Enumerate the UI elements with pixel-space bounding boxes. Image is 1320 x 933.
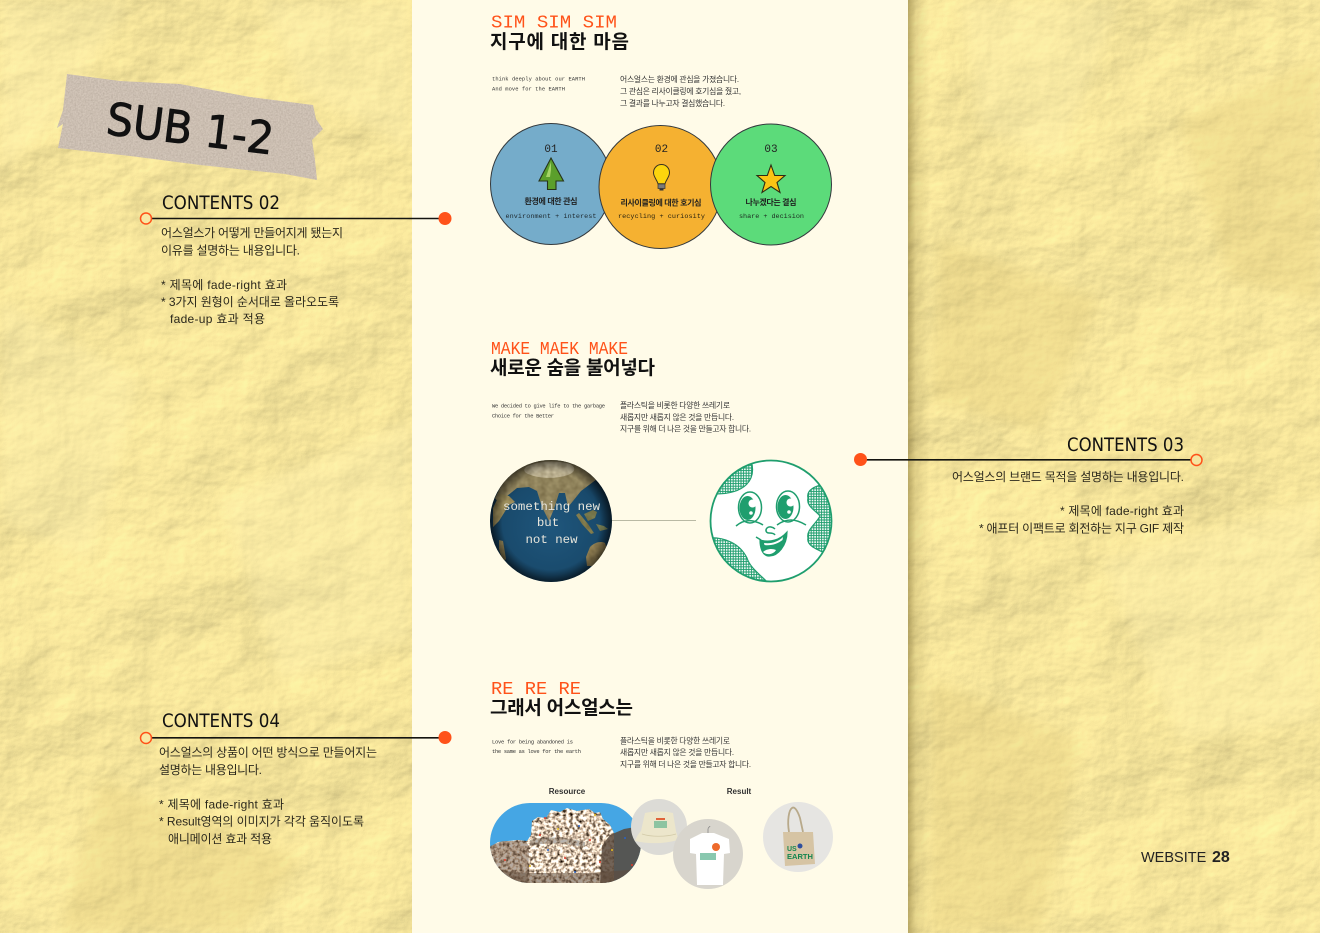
callout description bbox=[952, 470, 1184, 536]
callout description: 어스얼스의 브랜드 목적을 설명하는 내용입니다. bbox=[952, 470, 1184, 484]
section 1 intro text: 그 관심은 리사이클링에 호기심을 줬고, bbox=[620, 86, 741, 96]
dotted land patches bbox=[714, 464, 831, 580]
resource photo: plastic waste heap bbox=[490, 803, 641, 883]
circle 02: recycling + curiosity bbox=[618, 213, 705, 221]
globe caption: something new bbox=[503, 500, 601, 514]
callout description: * Result영역의 이미지가 각각 움직이도록 bbox=[159, 814, 364, 828]
icon: green arrow tree bbox=[539, 158, 564, 190]
circle 01: environment + interest bbox=[506, 213, 596, 221]
section 3 intro text: 새롭지만 새롭지 않은 것을 만듭니다. bbox=[620, 747, 734, 757]
connector line with end dots bbox=[140, 212, 452, 225]
globe caption bbox=[503, 500, 601, 547]
section 3 intro text: Love for being abandoned is bbox=[492, 740, 573, 746]
result photo: tote bag: EARTH bbox=[787, 852, 813, 861]
callout: contents 02 bbox=[140, 193, 452, 326]
section 2 heading: MAKE MAEK MAKE bbox=[490, 340, 656, 379]
callout: contents 04 bbox=[140, 711, 452, 846]
icon: light bulb bbox=[654, 164, 670, 190]
face bbox=[736, 491, 806, 556]
circle 03 bbox=[710, 124, 832, 245]
callout description: * 3가지 원형이 순서대로 올라오도록 bbox=[161, 295, 339, 309]
callout description: * 애프터 이팩트로 회전하는 지구 GIF 제작 bbox=[979, 522, 1184, 536]
section 3 heading: RE RE RE bbox=[490, 680, 633, 719]
callout description bbox=[159, 746, 377, 846]
column labels: Resource bbox=[549, 787, 586, 796]
circle 03: 03 bbox=[764, 144, 778, 156]
circle 01 bbox=[490, 124, 612, 244]
title text: SUB 1-2 bbox=[104, 92, 277, 165]
circle 03: share + decision bbox=[739, 213, 804, 221]
callout description: 어스얼스의 상품이 어떤 방식으로 만들어지는 bbox=[159, 746, 377, 760]
page number bbox=[1141, 849, 1230, 866]
section 1 intro text: 그 결과를 나누고자 결심했습니다. bbox=[620, 98, 725, 108]
three overlapping circles bbox=[490, 124, 832, 248]
section 1 heading: SIM SIM SIM: SIM SIM SIM bbox=[491, 14, 617, 34]
result photo: tote bag: US bbox=[787, 846, 797, 853]
section 2 heading: MAKE MAEK MAKE: 새로운 숨을 불어넣다 bbox=[490, 357, 656, 379]
page number: WEBSITE bbox=[1141, 850, 1207, 866]
callout heading: CONTENTS 02 bbox=[162, 193, 280, 214]
masking tape title bbox=[57, 74, 323, 180]
callout description: * 제목에 fade-right 효과 bbox=[161, 278, 287, 292]
section 3 heading: RE RE RE: RE RE RE bbox=[491, 680, 581, 700]
section 3 heading: RE RE RE: 그래서 어스얼스는 bbox=[490, 697, 633, 719]
globe caption: but bbox=[537, 516, 559, 530]
callout description: 설명하는 내용입니다. bbox=[159, 763, 262, 777]
section 2 heading: MAKE MAEK MAKE: MAKE MAEK MAKE bbox=[491, 340, 628, 360]
circle 03: 나누겠다는 결심 bbox=[746, 197, 796, 207]
connector between globes bbox=[612, 520, 696, 522]
center page panel bbox=[412, 0, 930, 933]
callout description: 어스얼스가 어떻게 만들어지게 됐는지 bbox=[161, 226, 343, 240]
callout description: * 제목에 fade-right 효과 bbox=[159, 798, 284, 812]
callout description: * 제목에 fade-right 효과 bbox=[1060, 504, 1184, 518]
callout: contents 03 bbox=[854, 435, 1202, 536]
callout description: 이유를 설명하는 내용입니다. bbox=[161, 244, 300, 258]
section 2 intro text: 새롭지만 새롭지 않은 것을 만듭니다. bbox=[620, 412, 734, 422]
column labels: Result bbox=[727, 787, 752, 796]
callout description: fade-up 효과 적용 bbox=[170, 312, 265, 326]
result photo: t-shirt bbox=[673, 819, 743, 889]
section 1 intro text bbox=[492, 74, 741, 108]
land masses bbox=[493, 458, 608, 566]
tape strip bbox=[57, 74, 323, 180]
callout description: 애니메이션 효과 적용 bbox=[168, 832, 272, 846]
result photo: bucket hat bbox=[631, 799, 687, 855]
section 1 heading: SIM SIM SIM: 지구에 대한 마음 bbox=[490, 31, 629, 53]
callout heading: CONTENTS 03 bbox=[1067, 435, 1184, 456]
circle 01: 01 bbox=[544, 144, 558, 156]
section 2 intro text: 플라스틱을 비롯한 다양한 쓰레기로 bbox=[620, 400, 730, 410]
result photo: tote bag bbox=[763, 802, 833, 872]
section 3 intro text bbox=[492, 736, 751, 769]
connector line with end dots bbox=[140, 731, 452, 744]
section 3 intro text: 플라스틱을 비롯한 다양한 쓰레기로 bbox=[620, 736, 730, 746]
section 1 intro text: 어스얼스는 환경에 관심을 가졌습니다. bbox=[620, 74, 739, 84]
page number: 28 bbox=[1212, 849, 1230, 866]
globe caption: not new bbox=[525, 533, 578, 547]
section 2 intro text: Choice for the Better bbox=[492, 414, 554, 420]
column labels bbox=[549, 787, 752, 796]
icon: star bbox=[757, 165, 785, 192]
circle 01: 환경에 대한 관심 bbox=[524, 196, 578, 206]
section 2 intro text bbox=[492, 400, 751, 434]
section 1 intro text: think deeply about our EARTH bbox=[492, 76, 585, 82]
section 3 intro text: the same as love for the earth bbox=[492, 749, 581, 755]
section 3 intro text: 지구를 위해 더 나은 것을 만들고자 합니다. bbox=[620, 759, 751, 769]
section 1 intro text: And move for the EARTH bbox=[492, 86, 565, 92]
circle 02: 리사이클링에 대한 호기심 bbox=[620, 198, 702, 208]
section 2 intro text: We decided to give life to the garbage bbox=[492, 404, 605, 410]
rotating earth globe bbox=[490, 458, 612, 582]
circle 02: 02 bbox=[655, 144, 668, 156]
callout description bbox=[161, 226, 343, 326]
smiling earth character bbox=[710, 460, 832, 582]
circle 02 bbox=[599, 126, 722, 248]
section 2 intro text: 지구를 위해 더 나은 것을 만들고자 합니다. bbox=[620, 424, 751, 434]
section 1 heading: SIM SIM SIM bbox=[490, 14, 629, 53]
connector line with end dots bbox=[854, 453, 1202, 466]
callout heading: CONTENTS 04 bbox=[162, 711, 280, 732]
